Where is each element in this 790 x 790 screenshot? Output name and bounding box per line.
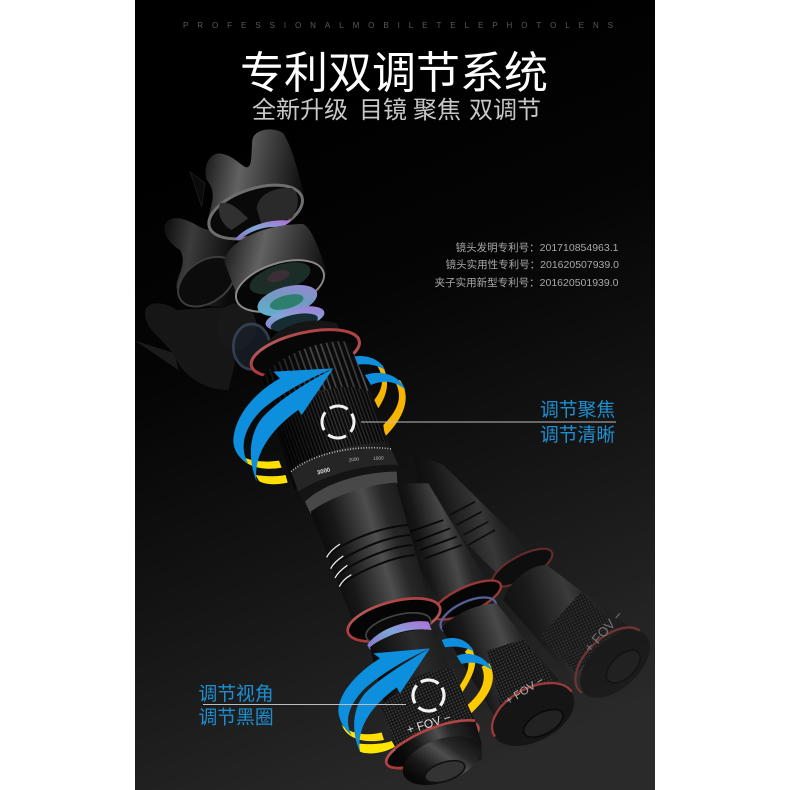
lower blue rotation arrow: [338, 648, 430, 752]
subtitle: 全新升级: [252, 97, 348, 124]
leader line: focus: [361, 421, 616, 423]
callout: field of view adjustment: 调节视角: [198, 683, 274, 704]
upper blue rotation arrow: [233, 368, 333, 482]
patent numbers: [435, 241, 619, 289]
ghost lens hoods: [135, 218, 270, 390]
dark panel: [135, 0, 655, 790]
patent numbers: 夹子实用新型专利号：201620501939.0: [435, 276, 619, 289]
main lens: [190, 129, 487, 790]
icon: upper adjustment dial: [316, 400, 360, 444]
callout: focus adjustment: 调节清晰: [540, 424, 615, 445]
callout: focus adjustment: 调节聚焦: [540, 399, 615, 420]
leader line: field of view: [203, 704, 406, 706]
focus barrel: 1000: [373, 455, 384, 461]
ghost lens far right: [413, 453, 662, 710]
subtitle: 目镜: [359, 97, 407, 124]
callout: field of view adjustment: 调节黑圈: [198, 706, 274, 728]
lens hood ring with glass: [224, 224, 330, 322]
lower FOV barrel: [370, 630, 487, 790]
iridescent lens elements: [254, 279, 327, 335]
lens hood top: [190, 129, 309, 249]
lower rotation arcs behind lower barrel: [442, 638, 493, 716]
front barrel with grooves: [305, 472, 445, 650]
focus barrel: 2000: [348, 456, 360, 463]
upper rotation arcs behind focus barrel: [238, 356, 406, 484]
patent numbers: 镜头实用性专利号：201620507939.0: [446, 258, 619, 271]
focus barrel: 3000: [317, 467, 332, 477]
focus barrel: [262, 341, 398, 508]
ghost lens middle: [397, 483, 585, 759]
patent numbers: 镜头发明专利号：201710854963.1: [456, 241, 619, 254]
title: 专利双调节系统: [240, 49, 548, 98]
icon: lower adjustment dial: [407, 674, 450, 717]
eyebrow text: PROFESSIONALMOBILETELEPHOTOLENS: [183, 21, 613, 30]
callout: field of view adjustment: [198, 683, 274, 728]
ghost lens far right: + FOV −: [581, 608, 626, 655]
subtitle: 聚焦: [413, 97, 461, 124]
ghost lens middle: + FOV −: [504, 674, 547, 708]
lower FOV barrel: + FOV −: [405, 710, 453, 737]
red focus ring: [247, 321, 364, 386]
callout: focus adjustment: [540, 399, 615, 445]
subtitle: 双调节: [469, 97, 541, 124]
